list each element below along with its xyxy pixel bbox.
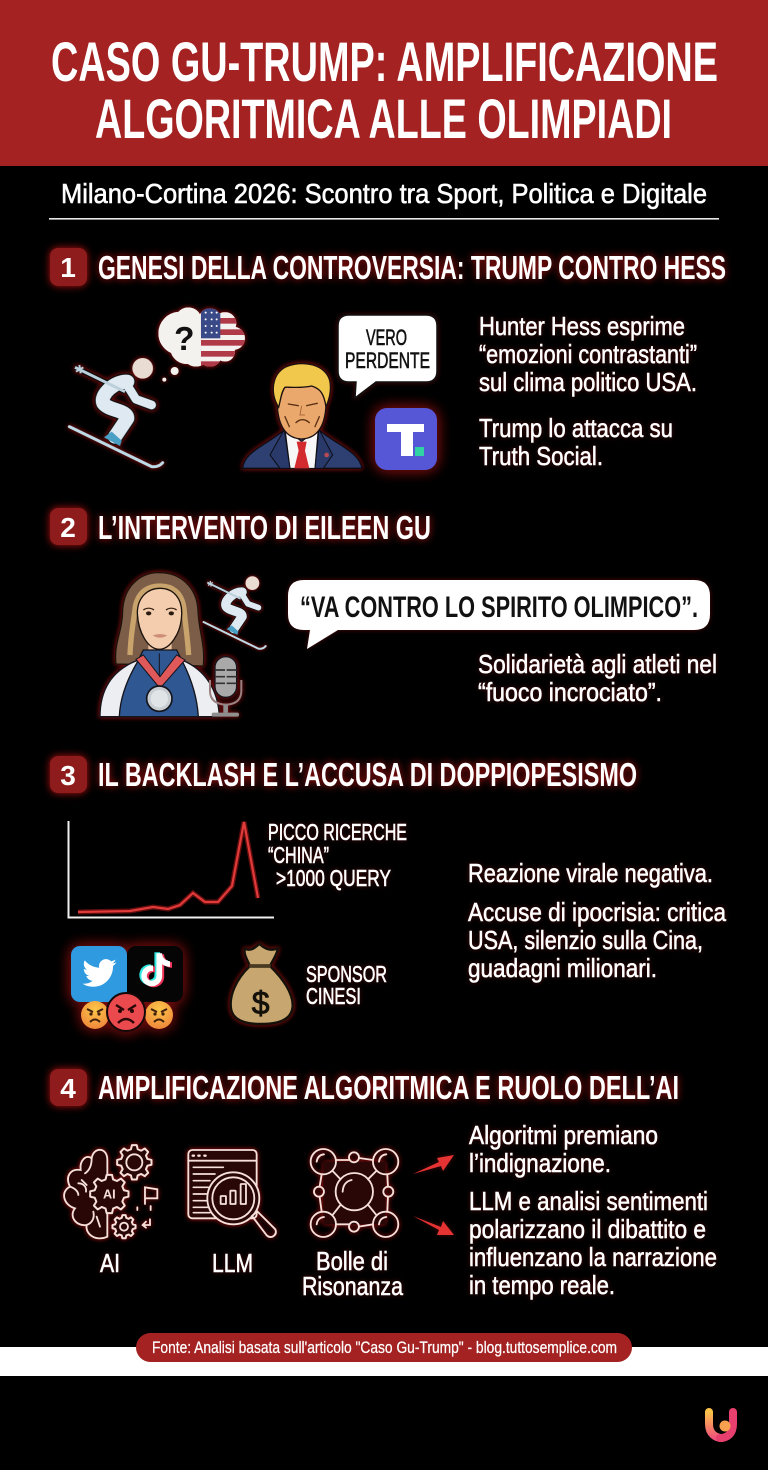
chart label: >1000 QUERY [276,865,391,891]
panel: section 4 [50,1069,717,1301]
subtitle: Milano-Cortina 2026: Scontro tra Sport, Politica e Digitale [61,178,707,209]
callout: VERO PERDENTE speech bubble: VERO [366,325,407,350]
labels: AI, LLM, bubbles [100,1246,403,1301]
callout: VERO PERDENTE speech bubble [338,315,437,398]
heading: section 3: 3 [60,760,76,791]
text block: section 3 [468,858,726,983]
heading: section 2: 2 [60,512,76,543]
chart label [268,819,407,891]
icon: LLM window with magnifier [188,1150,276,1237]
icon: AI brain and gears [64,1145,157,1238]
text block: section 1 [479,311,697,471]
icon: AI brain and gears: AI [103,1188,116,1202]
arrow: upper [413,1155,454,1174]
labels: AI, LLM, bubbles: AI [100,1248,120,1278]
footer white band [0,1347,768,1376]
chart label: “CHINA” [268,842,329,868]
text block: section 4 [469,1120,717,1300]
callout: quote speech bubble [288,580,710,649]
text block: section 2: Solidarietà agli atleti nel [478,649,717,679]
text block: section 3: USA, silenzio sulla Cina, [468,925,703,955]
icon: Trump portrait [243,364,362,468]
icons: Twitter, TikTok and angry emojis [71,946,183,1031]
heading: section 1: 1 [60,252,76,283]
text block: section 2 [478,649,717,707]
text block: section 4: influenzano la narrazione [469,1242,717,1272]
text block: section 3: guadagni milionari. [468,953,657,983]
panel: section 3 [50,756,726,1031]
heading: section 2: L’INTERVENTO DI EILEEN GU [98,509,431,546]
text block: section 4: polarizzano il dibattito e [469,1214,706,1244]
icon: money bag [231,944,293,1024]
text block: section 1: Truth Social. [479,441,603,471]
panel: section 2 [50,508,717,717]
text block: section 1: sul clima politico USA. [479,367,697,397]
header band with title [0,0,768,166]
labels: AI, LLM, bubbles: LLM [212,1248,253,1278]
footer source pill: Fonte: Analisi basata sull'articolo "Caso Gu-Trump" - blog.tuttosemplice.com [152,1338,617,1357]
footer source pill [136,1333,632,1362]
text block: section 3: Reazione virale negativa. [468,858,713,888]
chart label: PICCO RICERCHE [268,819,407,845]
label: Chinese sponsors: CINESI [306,983,361,1009]
icon: skier with thought cloud [69,303,248,467]
text block: section 4: Algoritmi premiano [469,1120,658,1150]
icon: small skier [204,576,266,649]
text block: section 1: Hunter Hess esprime [479,311,685,341]
text block: section 3: Accuse di ipocrisia: critica [468,897,726,927]
heading: section 4: 4 [60,1073,76,1104]
line chart: searches for China [68,821,274,918]
icon: Eileen Gu portrait with microphone [100,573,241,717]
panel: section 1 [50,248,726,471]
text block: section 4: LLM e analisi sentimenti [469,1186,708,1216]
label: Chinese sponsors: SPONSOR [306,961,387,987]
text block: section 4: in tempo reale. [469,1270,615,1300]
callout: VERO PERDENTE speech bubble: PERDENTE [345,348,430,373]
text block: section 2: “fuoco incrociato”. [478,677,662,707]
text block: section 1: “emozioni contrastanti” [479,339,697,369]
icon: Truth Social logo [375,408,437,470]
icon: money bag: $ [252,985,270,1021]
labels: AI, LLM, bubbles: Risonanza [302,1271,403,1301]
labels: AI, LLM, bubbles: Bolle di [316,1246,388,1276]
arrow: lower [413,1216,454,1235]
heading: section 2 [50,508,431,546]
icon: logo [709,1412,733,1438]
text block: section 4: l’indignazione. [469,1148,611,1178]
icon: resonance bubbles network [311,1149,398,1237]
icon: skier with thought cloud: ? [174,321,194,358]
label: Chinese sponsors [306,961,387,1009]
text block: section 1: Trump lo attacca su [479,413,673,443]
